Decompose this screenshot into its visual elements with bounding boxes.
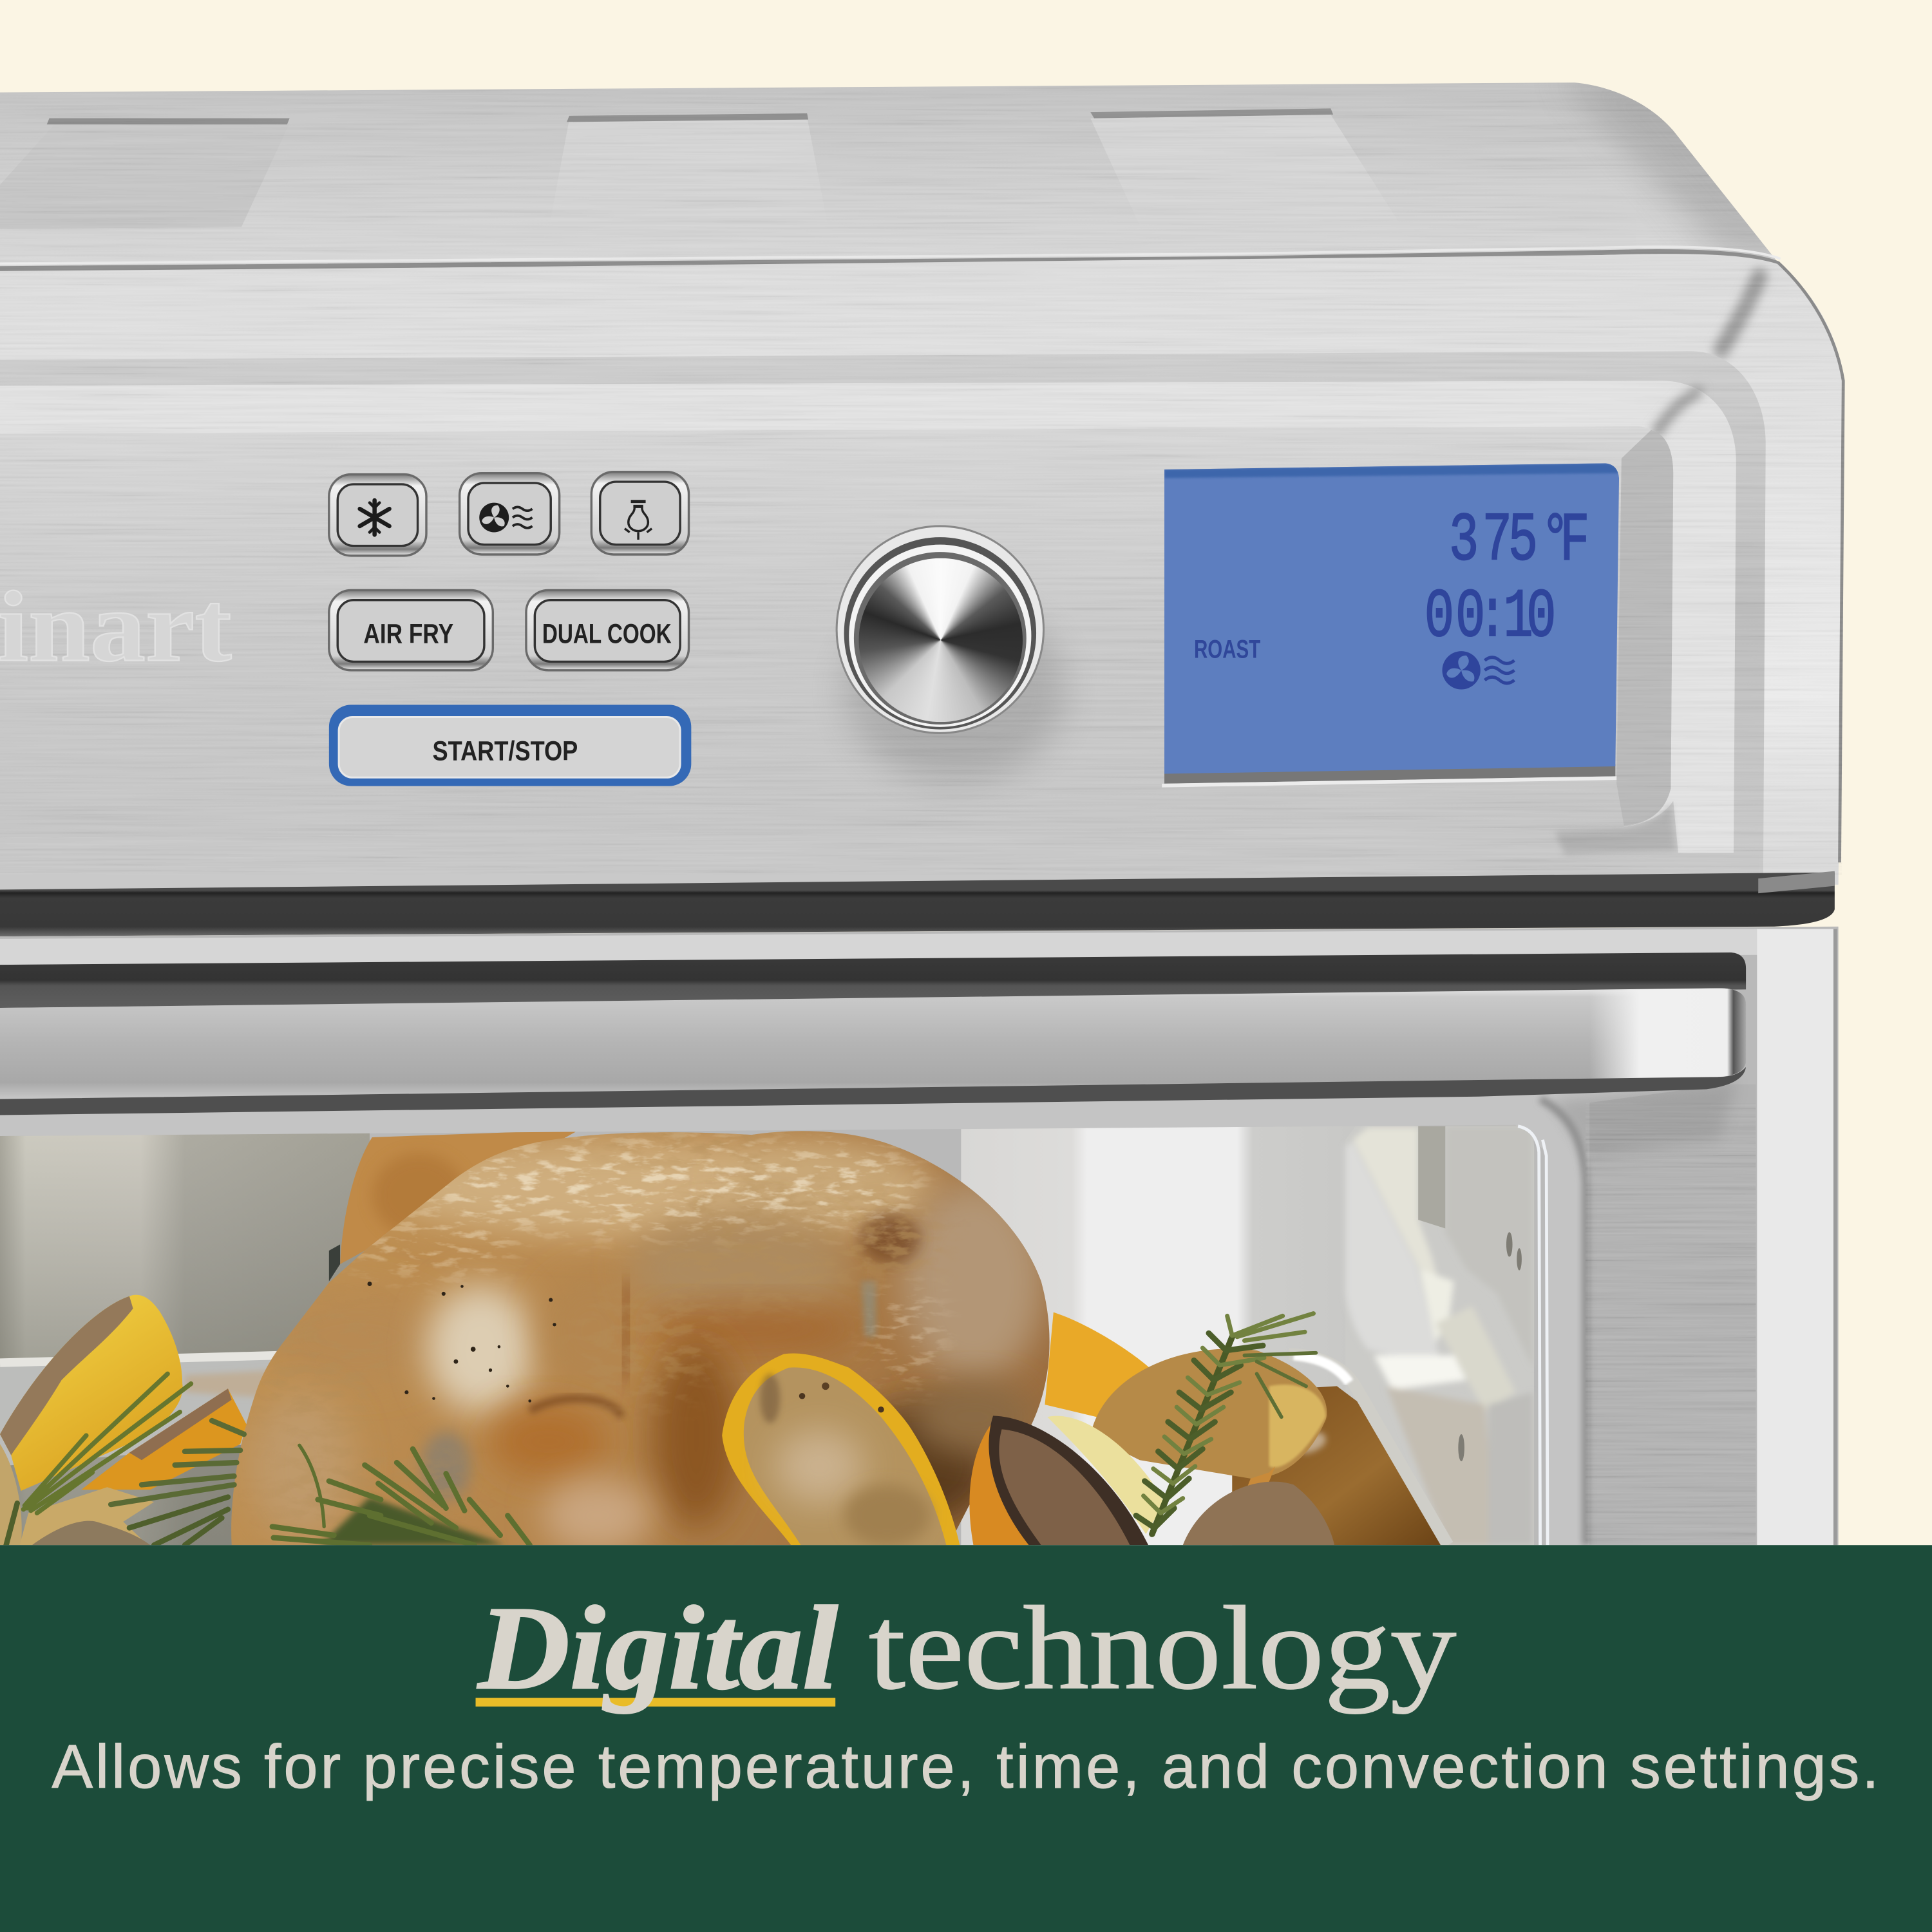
button: defrost	[329, 475, 426, 556]
back chicken lobe	[329, 1130, 579, 1282]
oven front face	[0, 254, 1844, 889]
orange spot	[489, 1405, 607, 1479]
knob cone face	[859, 558, 1023, 722]
right burnt spot	[860, 1214, 919, 1263]
orange lower centre	[647, 1303, 857, 1353]
interior right wall	[961, 1121, 1368, 1546]
knob shadow	[844, 598, 1066, 782]
cuisinart logo embossed: inart	[0, 571, 232, 683]
timer readout: 00:10	[1425, 579, 1556, 658]
handle gap	[0, 952, 1746, 1008]
door handle	[0, 988, 1746, 1099]
shadow under handle	[1553, 1082, 1738, 1158]
oven window with food	[0, 1109, 1534, 1553]
side rack panel	[1345, 1126, 1534, 1545]
button: dual cook	[526, 590, 689, 670]
pan right	[1232, 1354, 1448, 1545]
button: start stop	[329, 705, 691, 786]
control knob	[837, 526, 1044, 733]
door top strip	[0, 929, 1758, 965]
inner recess	[0, 381, 1736, 858]
control panel plate	[0, 426, 1673, 838]
description: Allows for precise temperature, time, and convection settings.	[52, 1732, 1879, 1801]
deep brown lower centre	[652, 1343, 741, 1528]
button: convection	[460, 473, 560, 554]
mid right breast	[542, 1275, 641, 1386]
screen face	[1164, 463, 1619, 774]
outer corner edge	[1778, 263, 1843, 862]
pepper dots	[368, 1282, 556, 1403]
window chrome lip	[1518, 1126, 1548, 1545]
right corner crease	[1721, 276, 1759, 350]
button: dual cook: DUAL COOK	[542, 619, 672, 650]
icon: fan and waves	[479, 503, 533, 533]
right top tone	[727, 1144, 936, 1233]
outer recess band	[0, 351, 1766, 882]
window bevel shadow	[1540, 1099, 1586, 1545]
screen lower lip	[1164, 764, 1615, 784]
potato right	[1092, 1349, 1327, 1486]
frame under handle	[0, 1084, 1725, 1545]
heading underline	[476, 1698, 835, 1707]
heading second word: technology	[869, 1582, 1457, 1714]
inner crease	[1657, 392, 1698, 431]
small potato far right	[1183, 1482, 1334, 1545]
rosemary left	[6, 1374, 244, 1545]
pan left	[0, 1356, 277, 1466]
heading first word: Digital	[477, 1582, 838, 1714]
dark flecks	[222, 1109, 1084, 1553]
door texture	[1586, 1103, 1756, 1545]
left lemons	[0, 1295, 247, 1545]
handle bright end	[1589, 988, 1746, 1082]
interior left wall	[0, 1128, 370, 1546]
lcd screen	[1162, 463, 1619, 788]
temperature readout: 375°F	[1449, 502, 1589, 581]
icon: fan and waves	[1442, 651, 1514, 689]
panel right bevel	[1616, 430, 1673, 826]
button: start stop: START/STOP	[433, 735, 578, 766]
handle underside	[0, 1067, 1746, 1115]
button: light	[591, 472, 689, 554]
left lower tone	[250, 1392, 354, 1540]
lower pale	[542, 1479, 653, 1553]
oven door	[0, 927, 1839, 1545]
grey fold	[861, 1282, 876, 1337]
icon: bulb	[625, 502, 652, 540]
taupe centre	[629, 1214, 850, 1325]
pale lemon wedge	[1047, 1416, 1164, 1534]
button: air fry: AIR FRY	[363, 619, 453, 650]
right edge line	[1833, 929, 1837, 1545]
leg folds	[530, 1399, 622, 1417]
door frame column	[1586, 1084, 1756, 1545]
centre lemon slice	[722, 1354, 960, 1546]
gasket strip	[0, 873, 1835, 936]
screen top edge	[1164, 463, 1619, 478]
rosemary centre	[272, 1445, 530, 1545]
lower band	[0, 801, 1759, 889]
gasket light wedge	[1758, 871, 1835, 893]
bird shadow gap	[421, 1432, 471, 1501]
oven body	[0, 74, 1848, 889]
door body	[0, 927, 1839, 1545]
pale breast	[426, 1285, 535, 1414]
crispy top tone	[382, 1140, 875, 1238]
bottom band	[0, 1545, 1932, 1932]
left shoulder tone	[271, 1290, 444, 1384]
lemon behind right	[1045, 1312, 1152, 1417]
shaded under plate corner	[1555, 803, 1676, 855]
dark shadow under thigh	[844, 1405, 992, 1528]
right edge column	[1757, 929, 1836, 1545]
chicken	[222, 1109, 1084, 1553]
oven lid	[0, 82, 1781, 272]
mode label: ROAST	[1194, 635, 1261, 664]
screen lip highlight	[1162, 776, 1616, 788]
dark grilled lemon	[969, 1416, 1148, 1545]
lower-right shade	[912, 1380, 1035, 1454]
right lobe	[902, 1183, 1045, 1380]
glossy flecks	[222, 1109, 1084, 1553]
icon: snowflake	[360, 500, 390, 535]
brushed metal texture	[0, 74, 1848, 875]
rosemary right	[1136, 1314, 1316, 1534]
button: air fry	[329, 590, 493, 670]
right crease	[623, 1282, 629, 1380]
